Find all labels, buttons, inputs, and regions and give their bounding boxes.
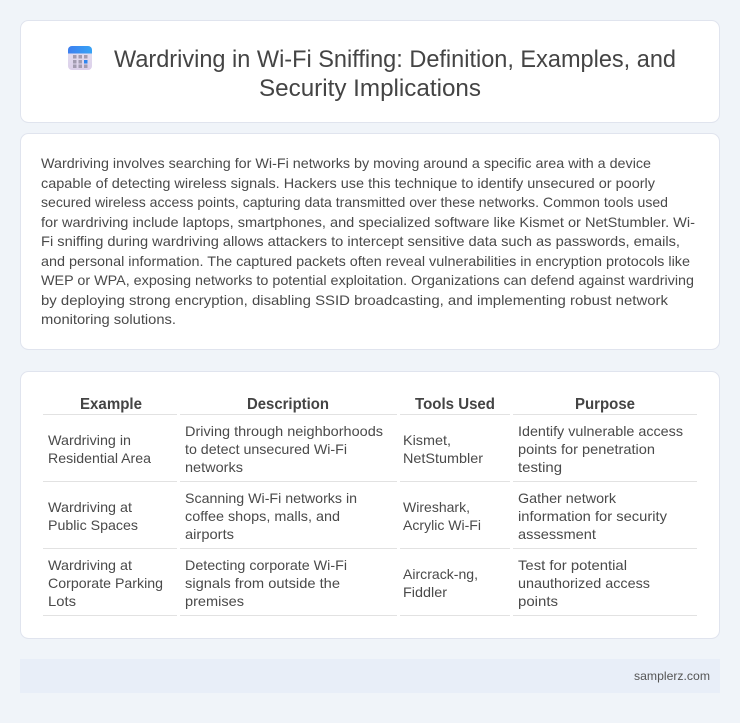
table header: Description <box>247 396 329 413</box>
text block: wardriving overview: and personal information. The captured packets often reveal vulnerabilities in encryption protocols like <box>41 253 690 269</box>
table row: residential: NetStumbler <box>403 450 483 466</box>
table row: corporate parking lots: Corporate Parking <box>48 575 163 591</box>
table row: corporate parking lots: Lots <box>48 593 76 609</box>
footer bar <box>20 659 720 693</box>
table row: residential: to detect unsecured Wi-Fi <box>185 441 347 457</box>
footer bar: samplerz.com <box>634 669 710 683</box>
title: Wardriving in Wi-Fi Sniffing: Definition, Examples, and <box>114 46 676 73</box>
table row: corporate parking lots: Aircrack-ng, <box>403 566 478 582</box>
text block: wardriving overview: secured wireless access points, capturing data transmitted over these networks. Common tools used <box>41 194 668 210</box>
table header: Tools Used <box>415 396 495 413</box>
text block: wardriving overview: WEP or WPA, exposing networks to potential exploitation. Organizations can defend against wardriving <box>41 272 694 288</box>
table row: residential: networks <box>185 459 243 475</box>
table row: corporate parking lots <box>48 557 650 609</box>
table row: public spaces: airports <box>185 526 234 542</box>
table row: residential: points for penetration <box>518 441 655 457</box>
table row: corporate parking lots: premises <box>185 593 244 609</box>
table row: residential: Kismet, <box>403 432 451 448</box>
table row: public spaces: Acrylic Wi-Fi <box>403 517 481 533</box>
text block: wardriving overview: for wardriving include laptops, smartphones, and specialized software like Kismet or NetStumbler. Wi- <box>41 214 695 230</box>
icon: calendar <box>68 46 92 70</box>
table header: Purpose <box>575 396 635 413</box>
table header: Example <box>80 396 142 413</box>
table row: residential: Wardriving in <box>48 432 131 448</box>
table row: public spaces: information for security <box>518 508 667 524</box>
text block: wardriving overview: monitoring solutions. <box>41 311 176 327</box>
text block: wardriving overview: Fi sniffing during wardriving allows attackers to intercept sensitive data such as passwords, emails, <box>41 233 680 249</box>
title: Security Implications <box>259 75 481 102</box>
text block: wardriving overview: Wardriving involves searching for Wi-Fi networks by moving around a specific area with a device <box>41 155 651 171</box>
table header <box>80 396 635 413</box>
table row: corporate parking lots: signals from outside the <box>185 575 340 591</box>
text block: wardriving overview <box>41 155 695 327</box>
panel: intro paragraph <box>20 134 720 350</box>
title <box>114 46 676 102</box>
table row: public spaces: Wardriving at <box>48 499 132 515</box>
table row: public spaces: assessment <box>518 526 596 542</box>
text block: wardriving overview: by deploying strong encryption, disabling SSID broadcasting, and implementing robust network <box>41 292 669 308</box>
table row: public spaces: Gather network <box>518 490 617 506</box>
panel: examples table <box>20 372 720 638</box>
table row: corporate parking lots: Detecting corporate Wi-Fi <box>185 557 347 573</box>
panel: title card <box>20 20 720 122</box>
table row: corporate parking lots: Test for potential <box>518 557 627 573</box>
table row: public spaces: Public Spaces <box>48 517 138 533</box>
table row: corporate parking lots: Wardriving at <box>48 557 132 573</box>
table row: corporate parking lots: unauthorized access <box>518 575 650 591</box>
table row: residential: Driving through neighborhoods <box>185 423 383 439</box>
table row: public spaces <box>48 490 667 542</box>
table row: residential: Residential Area <box>48 450 151 466</box>
table row: residential: Identify vulnerable access <box>518 423 683 439</box>
table row: residential <box>48 423 683 475</box>
table row: public spaces: Scanning Wi-Fi networks in <box>185 490 357 506</box>
text block: wardriving overview: capable of detecting wireless signals. Hackers use this technique to identify unsecured or poorly <box>41 175 655 191</box>
table row: corporate parking lots: Fiddler <box>403 584 447 600</box>
table row: public spaces: Wireshark, <box>403 499 470 515</box>
table row: public spaces: coffee shops, malls, and <box>185 508 340 524</box>
table row: corporate parking lots: points <box>518 593 558 609</box>
table row: residential: testing <box>518 459 562 475</box>
